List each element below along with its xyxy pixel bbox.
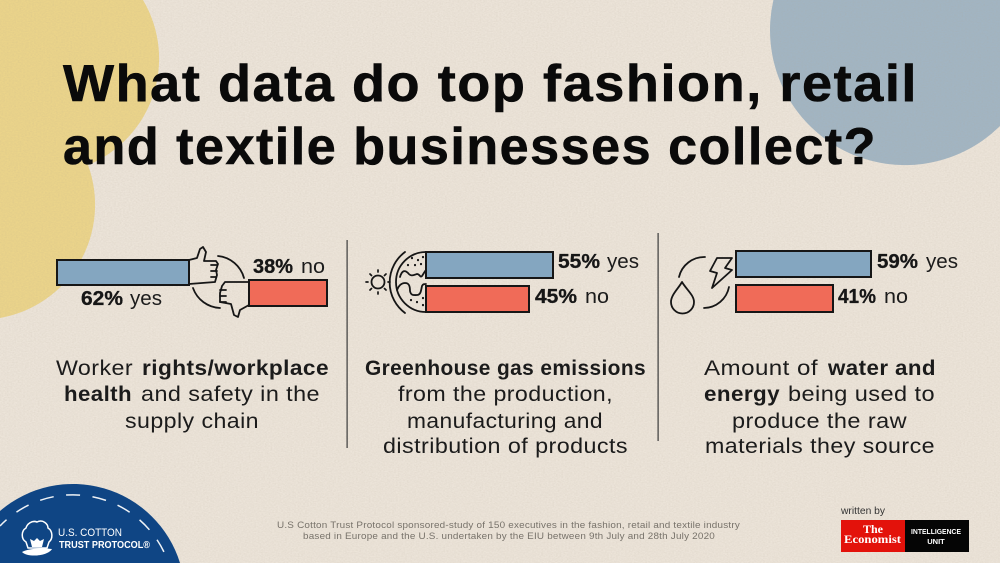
logo: U.S. Cotton Trust Protocol: U.S. COTTON xyxy=(58,527,122,539)
bar chart: greenhouse gas xyxy=(426,252,553,312)
label: 38% no: 38% xyxy=(253,256,293,278)
label: 38% no: no xyxy=(301,256,325,278)
divider right xyxy=(658,233,659,441)
title: and textile businesses collect? xyxy=(63,118,877,176)
panel: greenhouse gas xyxy=(365,251,646,458)
description: greenhouse gas: from the production, xyxy=(398,382,613,406)
logo: U.S. Cotton Trust Protocol: TRUST PROTOCOL® xyxy=(59,539,150,551)
label: written by: written by xyxy=(840,506,885,517)
logo: The Economist Intelligence Unit xyxy=(841,520,969,552)
description: worker rights xyxy=(56,356,329,433)
description: water and energy: materials they source xyxy=(705,434,935,458)
description: water and energy xyxy=(704,356,936,458)
logo: The Economist Intelligence Unit: The xyxy=(863,522,884,536)
label: 59% yes: 59% xyxy=(877,251,918,273)
logo: The Economist Intelligence Unit: INTELLIGENCE xyxy=(911,527,961,536)
description: worker rights: rights/workplace xyxy=(142,356,329,380)
panel: worker rights xyxy=(56,247,329,433)
label: 62% yes: 62% xyxy=(81,288,123,310)
panel: water and energy xyxy=(671,251,958,458)
label: 38% no xyxy=(253,256,325,278)
label: 45% no xyxy=(535,286,609,308)
title: What data do top fashion, retail xyxy=(63,55,918,113)
icon: thumbs up and thumbs down xyxy=(189,247,249,317)
icon: water drop and lightning bolt xyxy=(671,257,732,314)
footnote xyxy=(277,520,740,542)
label: 45% no: 45% xyxy=(535,286,577,308)
description: greenhouse gas xyxy=(365,356,646,458)
label: 45% no: no xyxy=(585,286,609,308)
footnote: U.S Cotton Trust Protocol sponsored-study of 150 executives in the fashion, retail and textile industry xyxy=(277,520,740,531)
label: 59% yes: yes xyxy=(926,251,958,273)
description: water and energy: water and xyxy=(827,356,936,380)
icon: sun and earth xyxy=(366,252,426,313)
description: water and energy: energy xyxy=(704,382,780,406)
label: 62% yes: yes xyxy=(130,288,162,310)
bar chart: water and energy xyxy=(736,251,871,312)
label: 55% yes: yes xyxy=(607,251,639,273)
logo: U.S. Cotton Trust Protocol xyxy=(0,484,180,563)
label: 41% no xyxy=(838,286,908,308)
description: worker rights: supply chain xyxy=(125,409,259,433)
logo: The Economist Intelligence Unit: Economist xyxy=(844,532,901,546)
title xyxy=(63,55,918,176)
label: 41% no: no xyxy=(884,286,908,308)
description: greenhouse gas: distribution of products xyxy=(383,434,628,458)
decorative blue circle xyxy=(770,0,1000,165)
description: water and energy: produce the raw xyxy=(732,409,907,433)
footnote: based in Europe and the U.S. undertaken by the EIU between 9th July and 28th July 2020 xyxy=(303,531,715,542)
divider left xyxy=(346,240,348,448)
label: 55% yes: 55% xyxy=(558,251,600,273)
description: worker rights: Worker xyxy=(56,356,133,380)
label: 41% no: 41% xyxy=(838,286,876,308)
label: 59% yes xyxy=(877,251,958,273)
description: greenhouse gas: manufacturing and xyxy=(407,409,603,433)
logo: The Economist Intelligence Unit: UNIT xyxy=(927,537,945,546)
description: worker rights: and safety in the xyxy=(141,382,320,406)
bar chart: worker rights xyxy=(57,260,327,306)
icon: cotton boll xyxy=(22,521,52,556)
label: 55% yes xyxy=(558,251,639,273)
description: water and energy: being used to xyxy=(788,382,935,406)
description: worker rights: health xyxy=(64,382,132,406)
description: water and energy: Amount of xyxy=(704,356,818,380)
description: greenhouse gas: Greenhouse gas emissions xyxy=(365,356,646,380)
label: 62% yes xyxy=(81,288,162,310)
decorative yellow shape xyxy=(0,0,159,318)
